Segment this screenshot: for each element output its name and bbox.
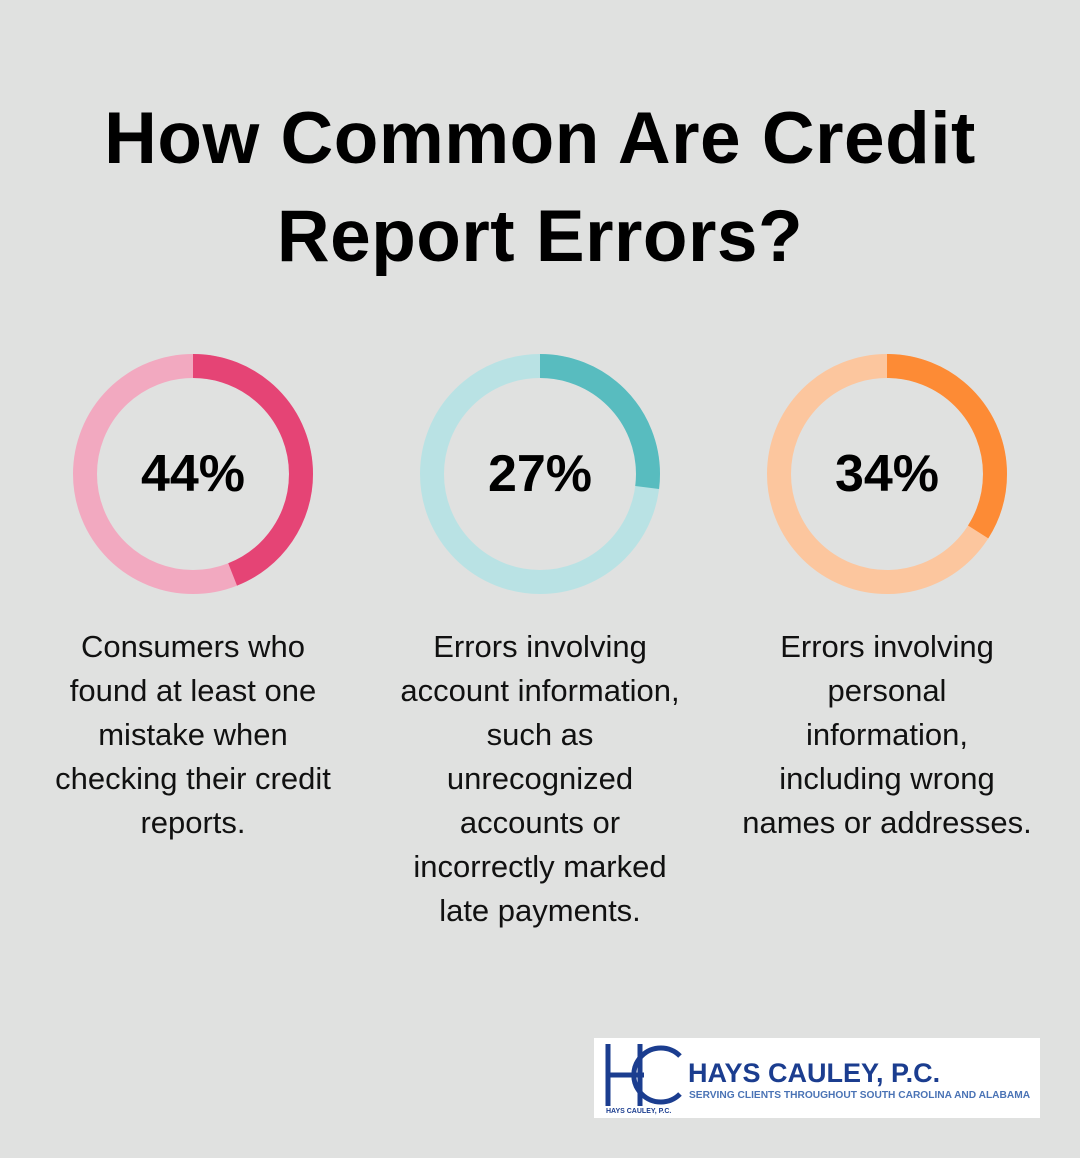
- text: personal info: [742, 629, 1032, 840]
- text: account info: account information,: [400, 673, 680, 708]
- text: consumers: reports.: [140, 805, 246, 840]
- text: account info: late payments.: [439, 893, 641, 928]
- text: account info: Errors involving: [433, 629, 647, 664]
- logo mark: [606, 1044, 682, 1106]
- text: consumers: [55, 629, 331, 840]
- logo: SERVING CLIENTS THROUGHOUT SOUTH CAROLINA AND ALABAMA: [689, 1090, 1030, 1101]
- text: personal info: information,: [806, 717, 968, 752]
- text: account info: unrecognized: [447, 761, 633, 796]
- text: personal info: names or addresses.: [742, 805, 1032, 840]
- title: How Common Are Credit: [104, 98, 976, 179]
- stat: 34%: 34%: [835, 445, 939, 503]
- text: consumers: found at least one: [70, 673, 316, 708]
- title: Report Errors?: [277, 196, 803, 277]
- text: account info: incorrectly marked: [413, 849, 667, 884]
- title: [104, 98, 976, 277]
- text: personal info: personal: [828, 673, 946, 708]
- donut: 44%: [85, 366, 301, 582]
- stat: 44%: 44%: [141, 445, 245, 503]
- text: consumers: mistake when: [98, 717, 288, 752]
- donut charts: [73, 354, 1007, 594]
- text: personal info: including wrong: [779, 761, 995, 796]
- text: consumers: Consumers who: [81, 629, 305, 664]
- logo text: HAYS CAULEY, P.C.: [688, 1058, 940, 1088]
- logo: HAYS CAULEY, P.C.: [606, 1108, 671, 1115]
- text: account info: such as: [487, 717, 593, 752]
- logo: [594, 1038, 1040, 1118]
- text: consumers: checking their credit: [55, 761, 331, 796]
- text: account info: accounts or: [460, 805, 620, 840]
- donut: 34%: [779, 366, 995, 582]
- text: personal info: Errors involving: [780, 629, 994, 664]
- text: account info: [400, 629, 680, 928]
- donut: 27%: [432, 366, 648, 582]
- stat: 27%: 27%: [488, 445, 592, 503]
